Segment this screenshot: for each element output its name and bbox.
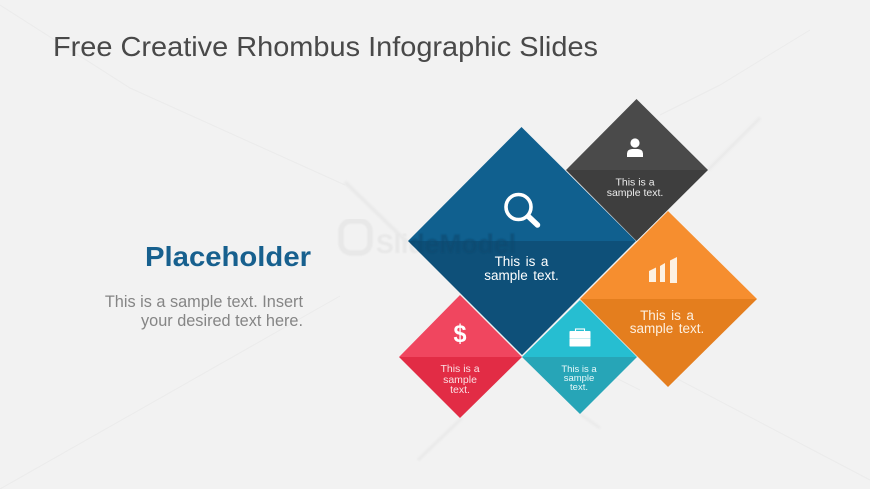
label: blue rhombus text: sample text. <box>484 268 559 283</box>
label: teal rhombus text: sample <box>564 373 594 384</box>
icon: person <box>627 138 643 157</box>
watermark: SlideModel <box>376 229 516 259</box>
text block: description: your desired text here. <box>141 312 303 330</box>
label: red rhombus text: sample <box>443 374 477 386</box>
label: dark gray rhombus text <box>607 176 663 199</box>
text block: description <box>105 293 303 330</box>
label: dark gray rhombus text: This is a <box>615 176 655 188</box>
label: teal rhombus text <box>561 364 597 393</box>
label: orange rhombus text: This is a <box>640 308 694 323</box>
label: red rhombus text <box>440 363 480 396</box>
label: red rhombus text: text. <box>450 384 470 396</box>
text block: description: This is a sample text. Insert <box>105 293 303 311</box>
heading: Placeholder: Placeholder <box>145 241 311 272</box>
rhombus: orange <box>580 211 757 387</box>
rhombus: blue <box>408 127 636 355</box>
watermark over blue: SlideModel <box>376 229 516 259</box>
watermark <box>341 221 516 259</box>
icon: magnifier <box>506 194 538 225</box>
icon: rising bars <box>649 257 677 283</box>
label: orange rhombus text: sample text. <box>630 321 704 336</box>
label: blue rhombus text: This is a <box>495 254 549 269</box>
title: Free Creative Rhombus Infographic Slides <box>53 31 598 62</box>
label: teal rhombus text: This is a <box>561 364 597 375</box>
label: teal rhombus text: text. <box>570 382 588 393</box>
icon: dollar: $ <box>454 320 467 348</box>
rhombus: red <box>399 295 522 418</box>
rhombus: teal <box>522 300 637 414</box>
rhombus: dark gray <box>566 99 708 241</box>
label: orange rhombus text <box>630 308 704 336</box>
label: red rhombus text: This is a <box>440 363 480 375</box>
label: blue rhombus text <box>484 254 559 283</box>
label: dark gray rhombus text: sample text. <box>607 187 663 199</box>
icon: briefcase <box>570 329 590 346</box>
